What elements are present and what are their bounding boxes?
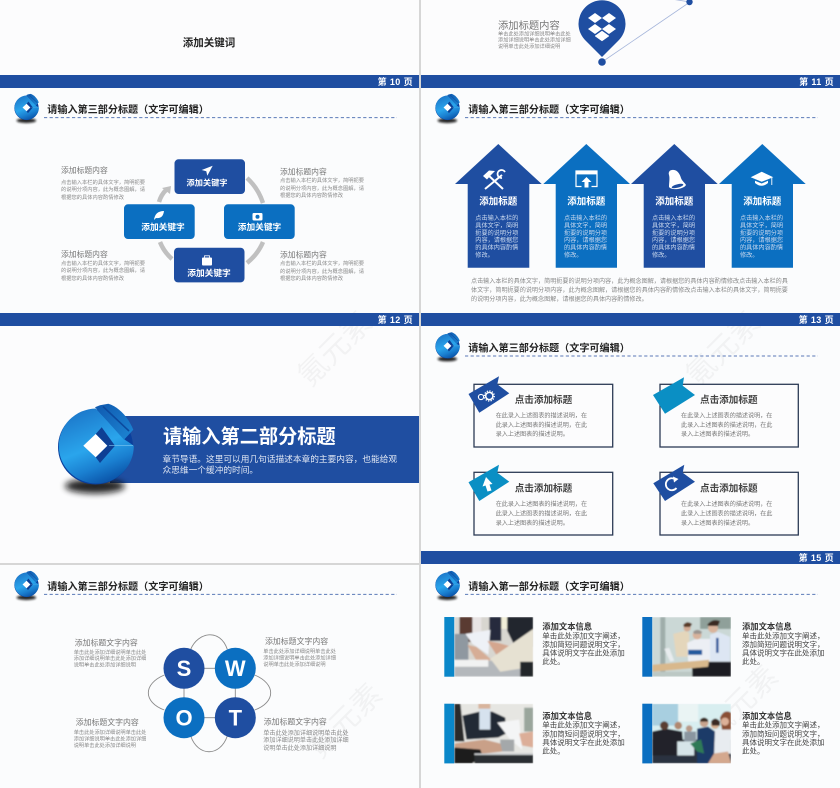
- panel: photo item 4: 此处。: [742, 746, 764, 756]
- text: top left: 添加标题内容: [61, 165, 108, 175]
- arrow 2: 扼要的说明分项: [564, 229, 607, 237]
- arrows ring: [159, 178, 263, 263]
- panel: photo item 4: 添加文本信息: [742, 711, 792, 721]
- box: bottom: 添加关键字: [187, 267, 231, 278]
- end dot: [686, 0, 693, 5]
- text: S: 单击此处添加详细说明单击此处: [74, 648, 146, 656]
- circle W: W: [225, 656, 246, 681]
- photo 3: [454, 704, 534, 764]
- heading: 请输入第三部分标题（文字可编辑）: [47, 580, 209, 593]
- circle O: O: [175, 706, 193, 730]
- text: S: [74, 638, 146, 669]
- arrow 3: 点击输入本栏的: [652, 214, 695, 222]
- arrow 1: 具体文字，简明: [475, 222, 518, 230]
- photo 2: [652, 617, 731, 677]
- body text: 单击此处添加详细说明单击此处: [498, 29, 571, 37]
- arrow 3: [631, 144, 718, 268]
- text: top right: 添加标题内容: [280, 166, 327, 176]
- arrow 3: 扼要的说明分项: [652, 229, 695, 237]
- arrow 2: 具体文字，简明: [564, 222, 607, 230]
- box 2: 在此录入上述图表的描述说明，在: [681, 412, 772, 420]
- arrow 1: 扼要的说明分项: [475, 229, 518, 237]
- text: T: 单击此处添加详细说明单击此处: [263, 729, 349, 737]
- box 2: [653, 377, 798, 447]
- box 2: 此录入上述图表的描述说明，在此: [681, 421, 772, 429]
- watermark bottom right: 氪元素: [698, 660, 785, 747]
- logo: [14, 94, 39, 123]
- box 2: 录入上述图表的描述说明。: [681, 430, 754, 438]
- icon: tools: [483, 170, 505, 189]
- icon: graduation cap: [751, 172, 773, 186]
- connector lines: [602, 0, 690, 62]
- text: O: 添加标题文字内容: [76, 717, 139, 727]
- icon: up arrow: [482, 477, 492, 492]
- box 1: 点击添加标题: [515, 394, 573, 406]
- section intro: 众思维一个缓冲的时间。: [162, 464, 258, 475]
- box: right: [224, 204, 295, 239]
- bar: page 13: 第 13 页: [799, 314, 834, 325]
- slide with arrows panel: [421, 88, 840, 314]
- text: O: 单击此处添加详细说明单击此处: [74, 728, 146, 736]
- text: bottom right: 添加标题内容: [280, 250, 327, 260]
- panel: photo item 4: 添加简短问题说明文字，: [742, 728, 824, 738]
- arrow 4: [719, 144, 806, 268]
- bar: page 15: 第 15 页: [799, 552, 834, 563]
- photo slide panel: [421, 564, 840, 788]
- pin shape: [578, 0, 625, 57]
- circle S: [164, 648, 204, 689]
- chart: SWOT diagram: [74, 635, 349, 752]
- arrow 3: 修改。: [652, 251, 670, 259]
- box 3: [468, 465, 613, 535]
- arrow 2: 的具体内容酌情: [564, 244, 607, 252]
- box: left: [124, 204, 195, 239]
- header: photo slide: [435, 571, 818, 600]
- icon: dropbox: [588, 13, 616, 41]
- body text: 添加详细说明单击此处添加详细: [498, 36, 571, 44]
- text: bottom right: [280, 250, 365, 282]
- box 3: 在此录入上述图表的描述说明，在: [496, 500, 587, 508]
- panel: four flag boxes: [468, 376, 798, 535]
- text: top right: 根据您的具体内容酌情修改: [280, 191, 344, 199]
- bar: page 12: 第 12 页: [378, 314, 413, 325]
- body text: [498, 29, 571, 50]
- box 4: 点击添加标题: [700, 482, 758, 494]
- box 1: 录入上述图表的描述说明。: [496, 430, 569, 438]
- panel: photo item 3: 添加文本信息: [542, 711, 592, 721]
- bar: page 10: 第 10 页: [378, 76, 413, 87]
- panel: photo item 1: 添加简短问题说明文字，: [542, 639, 625, 649]
- icon: refresh: [666, 478, 676, 490]
- panel: photo item 1: [444, 617, 625, 677]
- box 3: 录入上述图表的描述说明。: [496, 519, 569, 527]
- arrow 3: 的具体内容酌情: [652, 244, 695, 252]
- paragraph under arrows: 点击输入本栏的具体文字，简明扼要的说明分项内容，此为概念图解，请根据您的具体内容酌情修改点击输入本栏的具: [471, 277, 788, 285]
- text: W: [263, 636, 336, 668]
- icon: window upload: [576, 171, 597, 188]
- section heading: 请输入第二部分标题: [163, 425, 336, 448]
- text: W: 说明单击此处添加详细说明: [263, 660, 326, 668]
- body text: 说明单击此处添加详细说明: [498, 42, 560, 50]
- box 1: 在此录入上述图表的描述说明，在: [496, 412, 587, 420]
- box 1: [468, 376, 613, 447]
- box 4: [653, 465, 798, 535]
- arrow 4: 扼要的说明分项: [740, 229, 783, 237]
- box 4: 此录入上述图表的描述说明，在此: [681, 510, 772, 518]
- box: left: 添加关键字: [141, 221, 185, 232]
- arrow 4: 修改。: [740, 251, 758, 259]
- text: bottom left: 点击输入本栏的具体文字，简明扼要: [61, 259, 145, 267]
- panel: photo item 2: 具体说明文字在此处添加: [742, 648, 824, 658]
- bar: page 11: 第 11 页: [799, 76, 834, 87]
- text: top right: 点击输入本栏的具体文字，简明扼要: [280, 176, 364, 184]
- logo: [14, 571, 39, 600]
- icon: bell: [669, 170, 686, 189]
- watermark right middle: 氪元素: [680, 306, 767, 393]
- arrow 4: 具体文字，简明: [740, 222, 783, 230]
- panel: cycle diagram: [61, 159, 365, 282]
- text: top right: 的说明分项内容，此为概念图解，请: [280, 184, 365, 192]
- slide 11 panel: [421, 0, 840, 88]
- SWOT slide panel: [0, 565, 419, 788]
- box: right: 添加关键字: [238, 221, 282, 232]
- arrow 4: 点击输入本栏的: [740, 214, 783, 222]
- text: S: 添加详细说明单击此处添加详细: [74, 654, 146, 662]
- logo: [435, 571, 460, 600]
- panel: photo item 3: 具体说明文字在此处添加: [542, 737, 625, 747]
- box 2: 点击添加标题: [700, 394, 758, 406]
- pin dot: [598, 58, 606, 66]
- panel: section title band: [58, 404, 419, 494]
- heading: 请输入第一部分标题（文字可编辑）: [468, 580, 630, 593]
- box: top: 添加关键字: [187, 178, 227, 188]
- panel: photo item 2: 添加简短问题说明文字，: [742, 639, 824, 649]
- bar: page 11: [421, 75, 840, 88]
- arrow 4: 内容，请根据您: [740, 236, 783, 244]
- circle T: [215, 697, 256, 738]
- text: bottom left: 根据您的具体内容酌情修改: [61, 274, 125, 282]
- box 3: 点击添加标题: [515, 482, 573, 494]
- arrow 1: 修改。: [475, 251, 494, 259]
- arrow 3: 内容，请根据您: [652, 236, 695, 244]
- text: O: [74, 717, 146, 749]
- keyword label slide 10: 添加关键词: [183, 36, 235, 49]
- box 3: 此录入上述图表的描述说明，在此: [496, 510, 587, 518]
- arrow 2: 点击输入本栏的: [564, 214, 607, 222]
- panel: slide 11 dropbox pin: [498, 0, 693, 66]
- text: O: 添加详细说明单击此处添加详细: [74, 735, 146, 743]
- text: bottom left: 的说明分项内容，此为概念图解，请: [61, 266, 146, 274]
- header: cycle slide: [14, 94, 397, 123]
- arrow head: [162, 186, 171, 194]
- panel: photo item 4: 单击此处添加文字阐述，: [742, 720, 824, 730]
- panel: photo item 3: 此处。: [542, 746, 565, 756]
- paragraph under arrows: [471, 277, 788, 303]
- text: O: 说明单击此处添加详细说明: [74, 741, 136, 749]
- heading: 请输入第三部分标题（文字可编辑）: [468, 103, 630, 116]
- box: bottom: [174, 248, 244, 282]
- circle S: S: [177, 656, 191, 681]
- panel: photo item 3: 单击此处添加文字阐述，: [542, 720, 625, 730]
- text: S: 添加标题文字内容: [75, 638, 138, 648]
- panel: photo item 2: 此处。: [742, 656, 764, 666]
- bar: page 13: [421, 313, 840, 326]
- arrow 1: 内容，请根据您: [475, 236, 518, 244]
- arrow 3: 具体文字，简明: [652, 222, 695, 230]
- slide 10 panel: [0, 0, 419, 88]
- text: top left: 根据您的具体内容酌情修改: [61, 193, 125, 201]
- box 4: 在此录入上述图表的描述说明，在: [681, 500, 772, 508]
- panel: photo item 1: 单击此处添加文字阐述，: [542, 631, 625, 641]
- panel: photo item 2: [642, 617, 824, 677]
- text: T: 添加详细说明单击此处添加详细: [263, 736, 349, 744]
- arrow 1: [455, 144, 542, 268]
- arrow 2: 添加标题: [567, 196, 606, 208]
- circle T: T: [229, 706, 243, 730]
- arrow 1: 点击输入本栏的: [475, 214, 518, 222]
- arrow 2: 修改。: [564, 251, 582, 259]
- arrow 2: 内容，请根据您: [564, 236, 607, 244]
- text: top left: [61, 165, 146, 201]
- logo: [435, 332, 460, 361]
- panel: photo item 1: 具体说明文字在此处添加: [542, 648, 625, 658]
- watermark bottom left: 氪元素: [302, 678, 389, 765]
- text: W: 添加标题文字内容: [265, 636, 328, 646]
- slide 13 panel: [421, 326, 840, 552]
- box: top: [174, 159, 245, 194]
- panel: photo item 1: 此处。: [542, 656, 565, 666]
- text: S: 说明单击此处添加详细说明: [74, 661, 136, 669]
- icon: gears: [478, 391, 494, 401]
- panel: photo item 3: 添加简短问题说明文字，: [542, 728, 625, 738]
- text: bottom left: 添加标题内容: [61, 249, 108, 259]
- section intro: 章节导语。这里可以用几句话描述本章的主要内容，也能给观: [162, 453, 397, 464]
- slide 12 section panel: [0, 326, 419, 563]
- logo large: [58, 404, 134, 494]
- heading: 请输入第三部分标题（文字可编辑）: [47, 103, 209, 116]
- circle W: [215, 648, 256, 689]
- panel: photo item 3: [444, 704, 625, 763]
- slide with cycle diagram panel: [0, 88, 419, 314]
- panel: photo item 2: 单击此处添加文字阐述，: [742, 631, 824, 641]
- panel: photo item 1: 添加文本信息: [542, 621, 592, 631]
- text: T: 说明单击此处添加详细说明: [263, 744, 336, 752]
- bar: page 10: [0, 75, 419, 88]
- watermark left middle: 氪元素: [292, 306, 379, 393]
- arrow 1: 添加标题: [479, 196, 518, 208]
- paragraph under arrows: 体文字，简明扼要的说明分项内容，此为概念图解，请根据您的具体内容酌情修改点击输入本栏的具体文字，简明扼要: [471, 286, 788, 294]
- section intro: [162, 453, 397, 475]
- text: top left: 点击输入本栏的具体文字，简明扼要: [61, 178, 145, 186]
- header: SWOT slide: [14, 571, 397, 600]
- bar: page 15: [421, 551, 840, 564]
- title: 添加标题内容: [498, 19, 560, 32]
- paragraph under arrows: 的说明分项内容，此为概念图解，请根据您的具体内容酌情修改。: [471, 295, 648, 303]
- header: flags slide: [435, 332, 818, 361]
- text: W: 添加详细说明单击此处添加详细: [263, 654, 336, 662]
- text: T: [263, 717, 349, 752]
- text: top left: 的说明分项内容，此为概念图解，请: [61, 185, 146, 193]
- text: top right: [280, 166, 365, 199]
- text: W: 单击此处添加详细说明单击此处: [263, 647, 336, 655]
- header: arrows slide: [435, 94, 818, 123]
- heading: 请输入第三部分标题（文字可编辑）: [468, 341, 630, 354]
- panel: photo item 4: 具体说明文字在此处添加: [742, 737, 824, 747]
- panel: four arrows: [455, 144, 806, 303]
- petals and links: [148, 635, 271, 752]
- box 4: 录入上述图表的描述说明。: [681, 519, 754, 527]
- text: bottom right: 的说明分项内容，此为概念图解，请: [280, 267, 365, 275]
- arrow 2: [543, 144, 630, 268]
- arrow 4: 添加标题: [743, 196, 782, 208]
- arrow 1: 的具体内容酌情: [475, 244, 518, 252]
- panel: photo item 4: [642, 704, 824, 763]
- text: bottom right: 根据您的具体内容酌情修改: [280, 274, 344, 282]
- text: T: 添加标题文字内容: [264, 717, 327, 727]
- logo: [435, 94, 460, 123]
- circle O: [164, 697, 204, 738]
- box 1: 此录入上述图表的描述说明，在此: [496, 421, 587, 429]
- text: bottom left: [61, 249, 146, 282]
- bar: page 12: [0, 313, 419, 326]
- arrow 4: 的具体内容酌情: [740, 244, 783, 252]
- arrow 3: 添加标题: [655, 196, 694, 208]
- panel: photo item 2: 添加文本信息: [742, 621, 792, 631]
- photo 4: [652, 704, 731, 764]
- text: bottom right: 点击输入本栏的具体文字，简明扼要: [280, 259, 364, 267]
- photo 1: [454, 617, 534, 677]
